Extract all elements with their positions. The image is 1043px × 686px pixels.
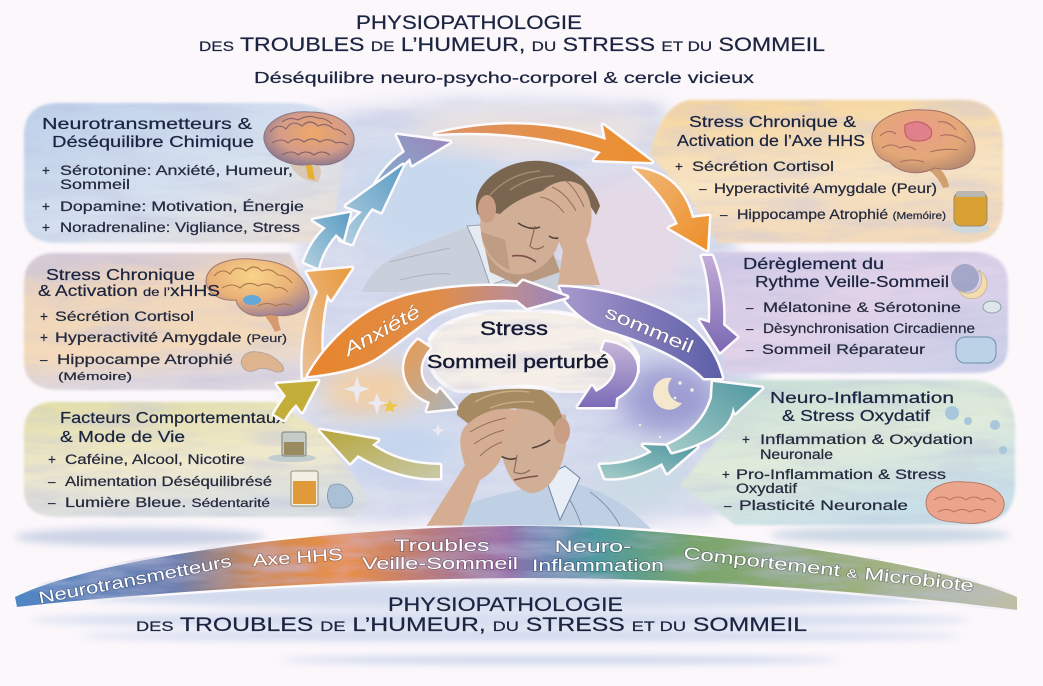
banner label: Neuro-Inflammation bbox=[532, 537, 664, 575]
title: bas: PHYSIOPATHOLOGIE bbox=[388, 595, 623, 616]
heading: neuro-inflammation: & Stress Oxydatif bbox=[782, 408, 931, 425]
brain illustration: activation axe HHS bbox=[872, 110, 975, 188]
heading: stress chronique droite: Activation de l’Axe HHS bbox=[677, 133, 865, 150]
panel: rythme veille-sommeil bbox=[712, 252, 1008, 373]
banner label: Troubles Veille-Sommeil bbox=[362, 536, 518, 573]
heading: neuro-inflammation bbox=[770, 390, 954, 425]
title: haut bbox=[199, 13, 825, 56]
list: rythme veille-sommeil: Dèsynchronisation Circadienne bbox=[763, 321, 975, 336]
icon: tasse bbox=[268, 432, 316, 462]
banner label: Neuro-Inflammation: Inflammation bbox=[532, 556, 664, 575]
heading: rythme veille-sommeil: Rythme Veille-Sommeil bbox=[755, 274, 949, 291]
banner label: Neuro-Inflammation: Neuro- bbox=[554, 537, 632, 556]
list: rythme veille-sommeil: Mélatonine & Sérotonine bbox=[763, 300, 961, 315]
heading: neurotransmetteurs: Neurotransmetteurs & bbox=[42, 116, 253, 133]
list: rythme veille-sommeil bbox=[746, 300, 975, 357]
label: Sommeil perturbé: Sommeil perturbé bbox=[427, 352, 609, 372]
list: facteurs comportementaux: – bbox=[48, 495, 56, 510]
list: rythme veille-sommeil: Sommeil Réparateur bbox=[762, 342, 926, 357]
icon: theiere bbox=[327, 484, 353, 508]
list: neurotransmetteurs: + bbox=[42, 199, 50, 214]
arrow: olive montant bbox=[274, 381, 318, 420]
list: neuro-inflammation: Inflammation & Oxydation bbox=[760, 432, 973, 447]
list: stress chronique droite bbox=[675, 159, 946, 222]
list: stress chronique droite: + bbox=[675, 159, 683, 174]
panel: stress chronique droite bbox=[650, 100, 1003, 243]
heading: neurotransmetteurs bbox=[42, 116, 254, 151]
list: facteurs comportementaux: Lumière Bleue. Sédentarité bbox=[65, 495, 270, 510]
brain illustration: axe HHS bbox=[206, 259, 309, 332]
list: stress chronique droite: Hippocampe Atrophié (Memóire) bbox=[737, 207, 946, 222]
arrow: bleu inferieur bbox=[304, 213, 350, 268]
list: stress chronique droite: – bbox=[720, 207, 728, 222]
list: neuro-inflammation: + bbox=[722, 467, 730, 482]
banner label: Neurotransmetteurs: Neurotransmetteurs bbox=[37, 552, 233, 608]
icon: cerveau glace bbox=[956, 337, 996, 363]
list: facteurs comportementaux bbox=[48, 452, 272, 510]
banner label: Troubles Veille-Sommeil: Veille-Sommeil bbox=[362, 554, 518, 573]
icon: cristaux bbox=[945, 406, 1007, 454]
list: rythme veille-sommeil: – bbox=[746, 300, 754, 315]
heading: stress chronique gauche: & Activation de l’ xHHS bbox=[38, 283, 220, 300]
arrow: teal droite bbox=[668, 382, 762, 452]
banner label: Troubles Veille-Sommeil: Troubles bbox=[394, 536, 490, 555]
list: stress chronique gauche: + bbox=[40, 309, 48, 324]
list: stress chronique droite: Hyperactivité Amygdale (Peur) bbox=[714, 181, 937, 196]
arrow: bande sommeil bbox=[560, 287, 722, 378]
list: neuro-inflammation: Plasticité Neuronale bbox=[739, 498, 908, 513]
arrow: orange haut bbox=[435, 124, 652, 162]
list: stress chronique gauche: Sécrétion Cortisol bbox=[55, 309, 194, 324]
banner bbox=[15, 526, 1017, 610]
heading: rythme veille-sommeil bbox=[743, 256, 949, 291]
title: bas bbox=[136, 595, 807, 636]
subtitle: Déséquilibre neuro-psycho-corporel & cercle vicieux bbox=[254, 70, 754, 87]
list: facteurs comportementaux: – bbox=[48, 474, 56, 489]
list: neurotransmetteurs: Sommeil bbox=[60, 177, 130, 192]
list: stress chronique gauche: (Mémoire) bbox=[58, 371, 132, 383]
banner label: Comportement & Microbiote: Comportement & Microbiote bbox=[682, 544, 975, 596]
list: neuro-inflammation: + bbox=[742, 432, 750, 447]
heading: stress chronique droite bbox=[677, 114, 865, 150]
list: neurotransmetteurs: Sérotonine: Anxiété, Humeur, bbox=[60, 163, 293, 178]
icon: capsule bbox=[983, 301, 1001, 313]
label: Anxiété: Anxiété bbox=[339, 302, 424, 361]
icon: bocal bbox=[950, 191, 990, 233]
arrow: orange gauche bbox=[303, 268, 352, 378]
illustration: homme haut, main sur le front bbox=[362, 161, 600, 296]
heading: stress chronique droite: Stress Chronique & bbox=[689, 114, 857, 131]
illustration: homme bas, main sur le front bbox=[424, 383, 652, 530]
heading: neurotransmetteurs: Déséquilibre Chimique bbox=[52, 134, 254, 151]
arrow: bleu superieur bbox=[340, 165, 403, 244]
heading: facteurs comportementaux: & Mode de Vie bbox=[60, 429, 185, 446]
heading: neuro-inflammation: Neuro-Inflammation bbox=[770, 390, 954, 407]
list: stress chronique gauche: – bbox=[40, 352, 48, 367]
icon: lune et etoiles bbox=[639, 369, 696, 438]
list: rythme veille-sommeil: – bbox=[746, 321, 754, 336]
panel: stress chronique gauche bbox=[24, 253, 312, 390]
list: rythme veille-sommeil: – bbox=[746, 342, 754, 357]
watercolor center wash bbox=[290, 100, 760, 520]
heading: facteurs comportementaux bbox=[60, 410, 285, 446]
arrow: bleu vers violet bbox=[372, 135, 450, 195]
list: neurotransmetteurs: + bbox=[42, 163, 50, 178]
panel: neuro-inflammation bbox=[680, 380, 1015, 525]
list: neuro-inflammation bbox=[722, 432, 973, 513]
list: stress chronique gauche: + bbox=[40, 330, 48, 345]
list: facteurs comportementaux: Caféine, Alcool, Nicotire bbox=[65, 452, 245, 467]
list: neurotransmetteurs: Noradrenaline: Vigliance, Stress bbox=[60, 220, 300, 235]
arrow: olive gauche bbox=[320, 430, 440, 478]
list: neurotransmetteurs: + bbox=[42, 220, 50, 235]
heading: stress chronique gauche bbox=[38, 267, 220, 300]
list: neuro-inflammation: Pro-Inflammation & Stress bbox=[736, 467, 946, 482]
title: haut: PHYSIOPATHOLOGIE bbox=[356, 13, 582, 34]
heading: stress chronique gauche: Stress Chronique bbox=[46, 267, 195, 284]
list: stress chronique gauche: Hyperactivité Amygdale (Peur) bbox=[55, 330, 287, 345]
arrow: petit violet interieur bbox=[578, 342, 637, 407]
panel: facteurs comportementaux bbox=[24, 402, 370, 517]
brain illustration: neuro-inflammation bbox=[926, 482, 1004, 523]
icon: verre bbox=[291, 471, 318, 506]
wash behind banner bbox=[15, 527, 1010, 664]
icon: lune bbox=[951, 264, 987, 299]
arrow: petit orange interieur bbox=[404, 340, 456, 411]
heading: rythme veille-sommeil: Dérèglement du bbox=[743, 256, 884, 273]
list: neurotransmetteurs: Dopamine: Motivation, Énergie bbox=[60, 199, 304, 214]
heading: facteurs comportementaux: Facteurs Comportementaux bbox=[60, 410, 285, 427]
icon: hippocampe bbox=[241, 352, 284, 372]
brain illustration: neurotransmetteurs bbox=[264, 112, 354, 182]
list: stress chronique droite: – bbox=[699, 181, 707, 196]
list: facteurs comportementaux: Alimentation Déséquilibrésé bbox=[65, 474, 272, 489]
list: stress chronique gauche: Hippocampe Atrophié bbox=[57, 352, 233, 367]
panel: neurotransmetteurs bbox=[24, 103, 354, 243]
list: stress chronique gauche bbox=[40, 309, 287, 383]
arrow: violet droite bbox=[700, 256, 737, 352]
list: neurotransmetteurs bbox=[42, 163, 304, 235]
arrow: orange droite bbox=[634, 168, 709, 250]
arrow: bande anxiete bbox=[308, 281, 567, 376]
banner label: Axe HHS: Axe HHS bbox=[252, 545, 343, 570]
list: neuro-inflammation: Oxydatif bbox=[736, 481, 797, 496]
arrow: teal bas bbox=[600, 445, 697, 478]
list: facteurs comportementaux: + bbox=[48, 452, 56, 467]
label: sommeil: sommeil bbox=[602, 302, 697, 357]
list: neuro-inflammation: – bbox=[724, 498, 732, 513]
icon: etoiles et croix bbox=[344, 376, 445, 437]
center cloud bbox=[428, 310, 640, 393]
title: bas: DES TROUBLES DE L’HUMEUR, DU STRESS ET DU SOMMEIL bbox=[136, 615, 807, 636]
label: Stress: Stress bbox=[480, 319, 548, 340]
title: haut: DES TROUBLES DE L’HUMEUR, DU STRESS ET DU SOMMEIL bbox=[199, 35, 825, 56]
list: neuro-inflammation: Neuronale bbox=[760, 447, 833, 462]
list: stress chronique droite: Sécrétion Cortisol bbox=[692, 159, 834, 174]
